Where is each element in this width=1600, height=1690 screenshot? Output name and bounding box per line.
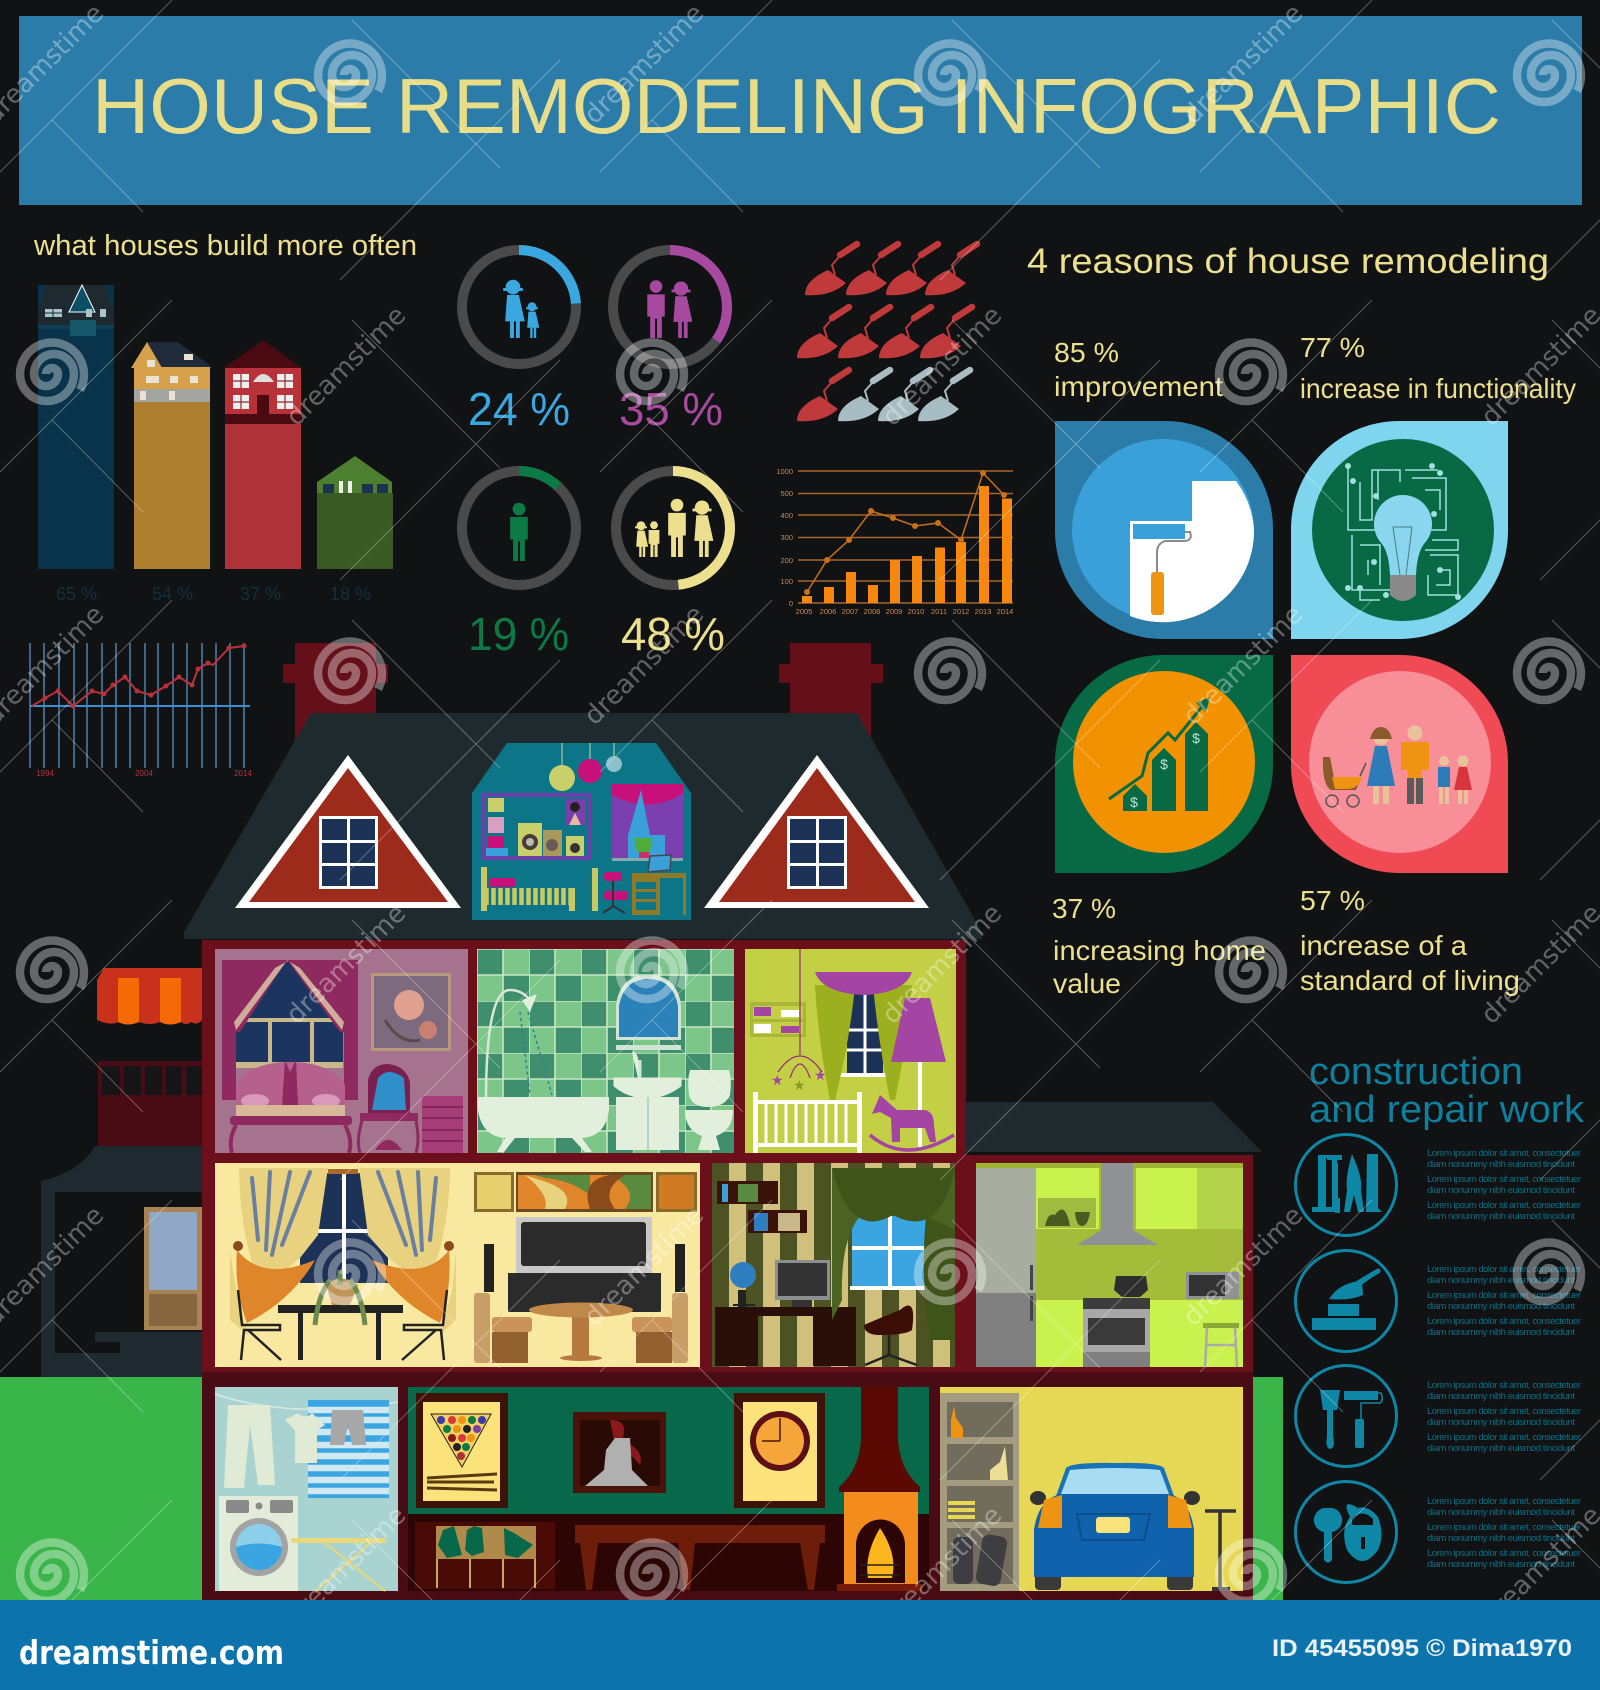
room: laundry [215,1387,398,1591]
baby mobile: ★ [793,1077,806,1093]
lorem text block 3: Lorem ipsum dolor sit amet, consectetuer [1427,1432,1581,1443]
curtains [832,1168,955,1340]
ring: 48 percent: 48 % [621,608,725,660]
lorem text block 2: Lorem ipsum dolor sit amet, consectetuer [1427,1264,1581,1275]
watermark overlay: dreamstime [877,301,1008,432]
billiard picture [416,1393,508,1508]
panel: construction and repair work [1296,1051,1585,1582]
ring: 19 percent [462,471,576,660]
leaf: paint roller [1055,421,1273,639]
round table [529,1302,633,1361]
balcony [98,1061,202,1146]
chart: orange bars and line: 500 [780,489,793,498]
room: bathroom [477,949,734,1153]
pot [1114,1276,1148,1297]
office chair [864,1306,917,1365]
chart: blue grid with red line: 2004 [135,769,153,778]
left dormer [235,755,461,908]
watermark overlay: dreamstime [1178,600,1309,731]
shelf unit [482,793,592,860]
lorem text block 2: Lorem ipsum dolor sit amet, consectetuer [1427,1290,1581,1301]
lorem text block 2: diam nonummy nibh euismod tincidunt [1427,1327,1575,1338]
knight picture [573,1412,666,1493]
reason text: standard of living [1300,885,1520,996]
baby mobile [771,949,827,1093]
sink [614,1052,681,1150]
flower picture [371,973,451,1051]
bar: red house 37% [224,340,302,569]
panel: what houses build more often [33,230,417,604]
room: living room [215,1163,700,1367]
toilet [685,1070,733,1150]
bike pump [1205,1511,1236,1589]
heading: what houses: what houses build more often [33,230,417,262]
lorem text block 1: diam nonummy nibh euismod tincidunt [1427,1159,1575,1170]
chart: orange bars and line: 200 [780,556,793,565]
panel: 4 reasons of house remodeling [1027,242,1576,999]
lorem text block 2 [1427,1264,1581,1338]
lorem text block 4: diam nonummy nibh euismod tincidunt [1427,1533,1575,1544]
heading: construction [1309,1051,1585,1131]
panel: household rings [462,250,730,660]
lorem text block 1: Lorem ipsum dolor sit amet, consectetuer [1427,1148,1581,1159]
watermark overlay: dreamstime [579,0,710,130]
grass [0,1377,1283,1600]
mother [1367,727,1395,804]
leaf: rising home value: $ [1192,730,1200,746]
lorem text block 1: diam nonummy nibh euismod tincidunt [1427,1185,1575,1196]
lorem text block 1 [1427,1148,1581,1222]
room: bedroom [215,949,468,1153]
lorem text block 4 [1427,1496,1581,1570]
clock picture [734,1393,825,1508]
lorem text block 4: Lorem ipsum dolor sit amet, consectetuer [1427,1496,1581,1507]
monitor [775,1260,830,1307]
son [1438,756,1450,804]
ring: 24 percent: 24 % [468,383,570,435]
ring: 35 percent: 35 % [619,383,723,435]
lorem text block 2: diam nonummy nibh euismod tincidunt [1427,1301,1575,1312]
bar: orange house 54% [131,342,212,569]
stove [1083,1298,1150,1367]
main roof [184,713,982,939]
room: garage [940,1387,1243,1591]
lorem text block 1: Lorem ipsum dolor sit amet, consectetuer [1427,1174,1581,1185]
dresser [422,1096,463,1153]
chart: orange bars and line: 2011 [931,607,947,616]
striped towel [308,1400,389,1498]
dining table and chairs [238,1290,447,1360]
t-shirt [285,1413,325,1463]
shower [486,990,552,1100]
curtains [815,972,912,1100]
baby mobile: ★ [814,1067,827,1083]
floor lamp [891,998,946,1147]
reason text: home value: increasing home [1053,935,1266,966]
reason text: home value [1052,893,1266,999]
bookshelves [717,1181,807,1233]
baby mobile: ★ [771,1072,784,1088]
leaf: light bulb circuit [1291,421,1508,639]
door [144,1207,202,1330]
lorem text block 3: diam nonummy nibh euismod tincidunt [1427,1443,1575,1454]
shelving [940,1393,1019,1591]
ring: 35 percent [613,250,727,435]
watermark overlay: dreamstime [579,600,710,731]
room: nursery [745,949,956,1153]
lorem text block 3: Lorem ipsum dolor sit amet, consectetuer [1427,1406,1581,1417]
chart: orange bars and line: 0 [789,599,793,608]
reason text: home value: 37 % [1052,893,1116,924]
wall shelf [750,1002,806,1037]
chart: orange bars and line: 2005 [796,607,812,616]
watermark overlay: dreamstime [281,1501,412,1632]
window [300,1169,388,1283]
chart: blue grid with red line: 2014 [234,769,252,778]
leaf: rising home value: $ [1160,756,1168,772]
lower cabinets [1036,1300,1243,1367]
washing machine [219,1496,298,1591]
leaf: rising home value: $ [1130,794,1138,810]
chair [358,1064,418,1153]
reason text: improvement [1054,337,1223,402]
lorem text block 1: Lorem ipsum dolor sit amet, consectetuer [1427,1200,1581,1211]
sideboard with cushions [415,1522,555,1589]
lorem text block 3: Lorem ipsum dolor sit amet, consectetuer [1427,1380,1581,1391]
desk [632,855,686,915]
bed [230,1060,352,1153]
lorem text block 4: Lorem ipsum dolor sit amet, consectetuer [1427,1522,1581,1533]
reason text: improvement: improvement [1054,371,1223,402]
watermark overlay: dreamstime [1178,1201,1309,1332]
porch [41,1146,202,1377]
speakers [484,1244,685,1292]
annex roof [966,1102,1262,1152]
media cabinet [508,1273,661,1312]
chart: orange bars and line: 2013 [975,607,991,616]
chart: orange bars and line: 2010 [908,607,924,616]
room: kitchen [976,1163,1243,1367]
stroller [1323,757,1366,807]
title: HOUSE REMODELING INFOGRAPHIC [92,62,1501,150]
reason text: functionality: 77 % [1300,332,1365,363]
title banner [19,16,1582,205]
chart: orange bars and line: 2007 [842,607,858,616]
awning [97,968,202,1024]
ironing board [291,1538,386,1591]
watermark overlay: dreamstime [281,301,412,432]
reason text: home value: value [1053,968,1121,999]
house [0,643,1283,1600]
bar value labels: 37 % [240,584,281,604]
bar value labels: 54 % [152,584,193,604]
crib [753,1092,862,1153]
tall speaker [592,868,598,911]
upper cabinets [1036,1168,1243,1229]
watermark overlay: dreamstime [877,1501,1008,1632]
room: billiard room [408,1387,929,1591]
footer credit: ID 45455095 © Dima1970 [1272,1635,1572,1662]
lorem text block 2: diam nonummy nibh euismod tincidunt [1427,1275,1575,1286]
chart: orange bars and line [776,467,1013,616]
trousers [224,1405,275,1488]
tub [478,1097,609,1152]
lorem text block 4: Lorem ipsum dolor sit amet, consectetuer [1427,1548,1581,1559]
ring: 48 percent [616,471,730,660]
chart: orange bars and line: 2009 [886,607,902,616]
grey shorts [330,1410,366,1445]
left extension [41,968,202,1377]
chimney right [779,643,883,780]
leaf: family [1291,655,1508,873]
daughter [1454,756,1472,804]
chart: orange bars and line: 2008 [864,607,880,616]
reason text: standard of living: standard of living [1300,965,1520,996]
footer bar [0,1600,1600,1690]
mirror [616,975,681,1050]
armchairs [474,1293,688,1363]
chart: blue grid with red line: 1994 [36,769,54,778]
range hood [1077,1163,1158,1245]
chair [603,872,628,913]
hanging lamps [549,743,622,791]
watermark overlay: dreamstime [281,899,412,1030]
reason text: functionality: increase in functionality [1300,373,1576,404]
lorem text block 4: diam nonummy nibh euismod tincidunt [1427,1559,1575,1570]
watermark overlay: dreamstime [1178,0,1309,130]
icon: trowel and bricks [1296,1250,1396,1352]
car [1030,1463,1200,1590]
watermark overlay: dreamstime [877,899,1008,1030]
bed [481,867,575,911]
heading: construction: and repair work [1309,1089,1585,1131]
bar: green house 18% [317,456,393,569]
lorem text block 3: diam nonummy nibh euismod tincidunt [1427,1391,1575,1402]
icon group: trowels [797,244,977,421]
chart: orange bars and line: 2014 [997,607,1013,616]
chart: orange bars and line: 2006 [820,607,836,616]
lorem text block 3 [1427,1380,1581,1454]
curtains [230,1168,456,1335]
chart: blue grid with red line [30,643,252,778]
lorem text block 3: diam nonummy nibh euismod tincidunt [1427,1417,1575,1428]
reason text: standard of living: increase of a [1300,930,1467,961]
window [850,1216,932,1290]
lorem text block 4: diam nonummy nibh euismod tincidunt [1427,1507,1575,1518]
lorem text block 1: diam nonummy nibh euismod tincidunt [1427,1211,1575,1222]
icon: key and lock [1296,1482,1396,1582]
stool [1203,1323,1239,1367]
reason text: standard of living: 57 % [1300,885,1365,916]
refrigerator [976,1168,1036,1367]
chart: orange bars and line: 400 [780,511,793,520]
watermark overlay: dreamstime [579,1201,710,1332]
bar value labels [56,584,371,604]
chimney left [283,643,388,780]
chart: orange bars and line: 100 [780,577,793,586]
desk [715,1307,856,1366]
television [516,1217,652,1273]
chart: orange bars and line: 2012 [953,607,969,616]
bar: navy house 65% [38,285,114,569]
reason text: functionality [1300,332,1576,404]
attic room [472,743,691,920]
globe [730,1262,756,1307]
right dormer [704,755,929,908]
footer logo text: dreamstime.com [19,1633,284,1672]
heading: construction: construction [1309,1051,1523,1093]
bar value labels: 65 % [56,584,97,604]
house body [202,940,1253,1600]
wall pictures [474,1172,697,1212]
rocking horse [870,1095,954,1150]
low table [575,1525,825,1590]
father [1401,726,1429,804]
window [838,993,894,1077]
chart: orange bars and line: 1000 [776,467,793,476]
reason text: improvement: 85 % [1054,337,1119,368]
room: study [712,1163,955,1367]
window and curtains [222,960,358,1100]
lorem text block 2: Lorem ipsum dolor sit amet, consectetuer [1427,1316,1581,1327]
window with castle [612,784,683,861]
heading: 4 reasons: 4 reasons of house remodeling [1027,242,1549,281]
chart: orange bars and line: 300 [780,533,793,542]
fireplace [837,1387,922,1591]
microwave [1186,1272,1239,1299]
ring: 19 percent: 19 % [468,608,569,660]
ring: 24 percent [462,250,576,435]
leaf: rising home value [1055,655,1273,873]
icon: brush and roller [1296,1366,1396,1466]
plant [315,1270,365,1325]
bar value labels: 18 % [330,584,371,604]
icon: hand tools [1296,1134,1396,1236]
